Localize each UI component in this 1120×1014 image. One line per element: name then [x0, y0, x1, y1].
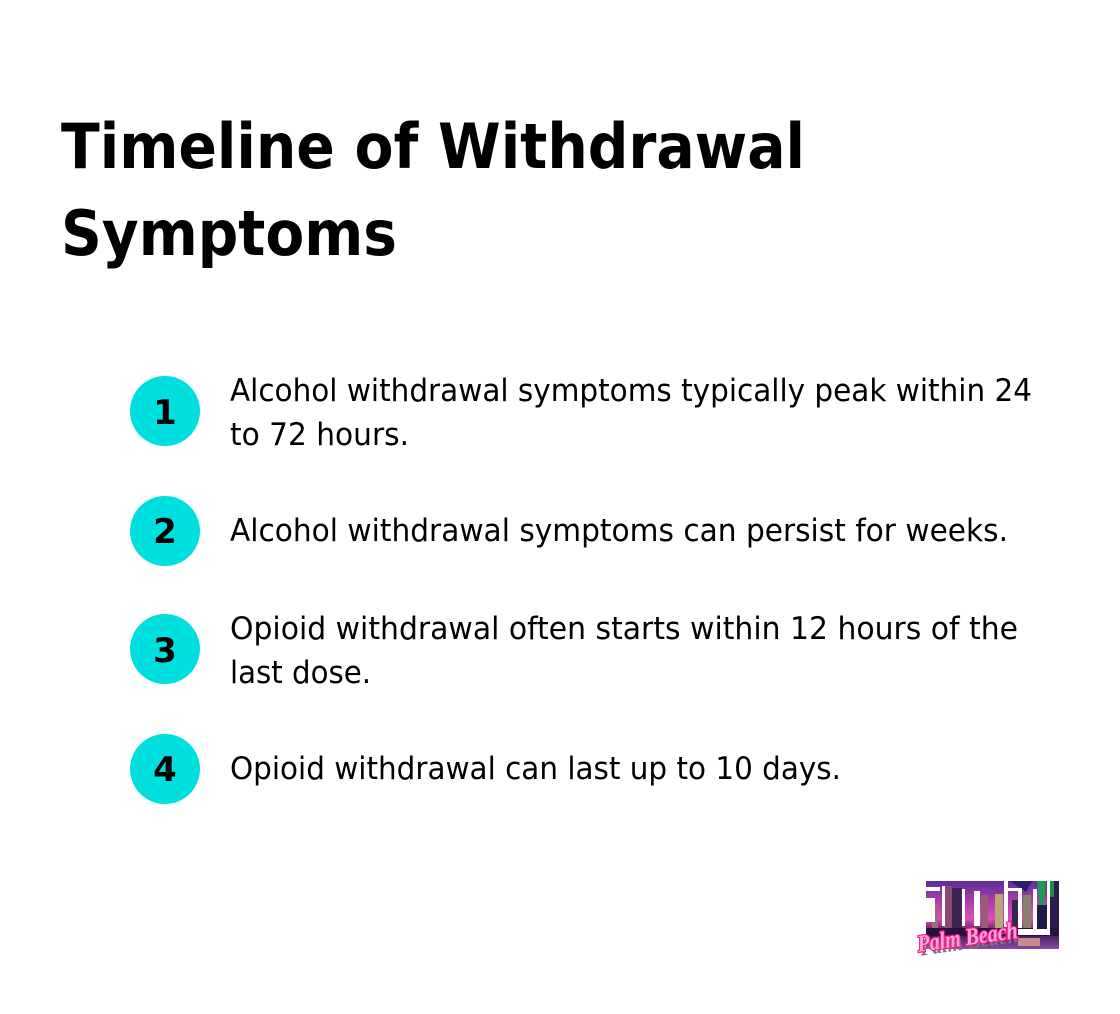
Palm Beach script: Palm Beach — [917, 922, 1020, 962]
step 3 text — [230, 611, 1018, 691]
number badge 4 — [130, 734, 200, 804]
number badge 2 — [130, 496, 200, 566]
step 1 text: to 72 hours. — [230, 417, 409, 453]
logo: Amity Palm Beach — [915, 881, 1059, 962]
logo skyline — [926, 881, 1059, 946]
step 3 text: last dose. — [230, 655, 371, 691]
step 1 text: Alcohol withdrawal symptoms typically peak within 24 — [230, 373, 1032, 409]
number badge 3: 3 — [153, 631, 177, 671]
number badge 2: 2 — [153, 512, 177, 552]
step 2 — [130, 496, 1008, 566]
step 1 — [130, 373, 1032, 453]
step 2 text: Alcohol withdrawal symptoms can persist for weeks. — [230, 513, 1008, 549]
number badge 1 — [130, 376, 200, 446]
number badge 4: 4 — [153, 750, 177, 790]
title — [61, 110, 805, 270]
number badge 3 — [130, 614, 200, 684]
step 3 text: Opioid withdrawal often starts within 12 hours of the — [230, 611, 1018, 647]
step 4 — [130, 734, 841, 804]
step 3 — [130, 611, 1018, 691]
title: Symptoms — [61, 197, 397, 270]
step 4 text: Opioid withdrawal can last up to 10 days. — [230, 751, 841, 787]
white amity letter cutouts — [926, 881, 1050, 935]
title: Timeline of Withdrawal — [61, 110, 805, 183]
number badge 1: 1 — [153, 393, 177, 433]
Palm Beach script: Palm Beach — [915, 918, 1019, 958]
step 1 text — [230, 373, 1032, 453]
